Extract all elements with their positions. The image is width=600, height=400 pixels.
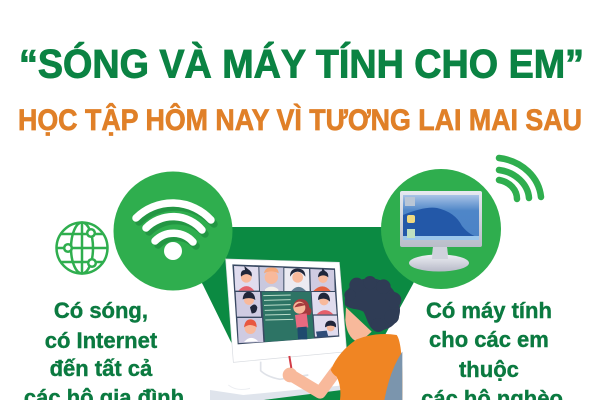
left caption: có Internet: [45, 328, 158, 353]
green backdrop: [173, 227, 440, 400]
monitor: [226, 259, 347, 362]
right caption: thuộc: [459, 357, 519, 382]
left caption: đến tất cả: [50, 356, 153, 381]
left caption: Có sóng,: [54, 298, 148, 323]
wifi signal arcs: [499, 158, 541, 199]
lesson text lines: [263, 295, 293, 320]
right caption: cho các em: [429, 327, 549, 352]
globe icon: [56, 222, 108, 274]
participants: [234, 266, 338, 343]
white desk area: [205, 334, 349, 400]
right caption: Có máy tính: [426, 298, 552, 323]
desk: [210, 385, 347, 400]
video call screen: [232, 264, 339, 344]
wifi circle icon: [114, 172, 232, 290]
student: [283, 276, 402, 400]
computer circle icon: [381, 169, 501, 289]
title: “SÓNG VÀ MÁY TÍNH CHO EM”: [19, 42, 584, 86]
monitor stand: [261, 362, 308, 379]
teacher: [293, 299, 312, 339]
illustration: online class and student: [210, 259, 402, 400]
